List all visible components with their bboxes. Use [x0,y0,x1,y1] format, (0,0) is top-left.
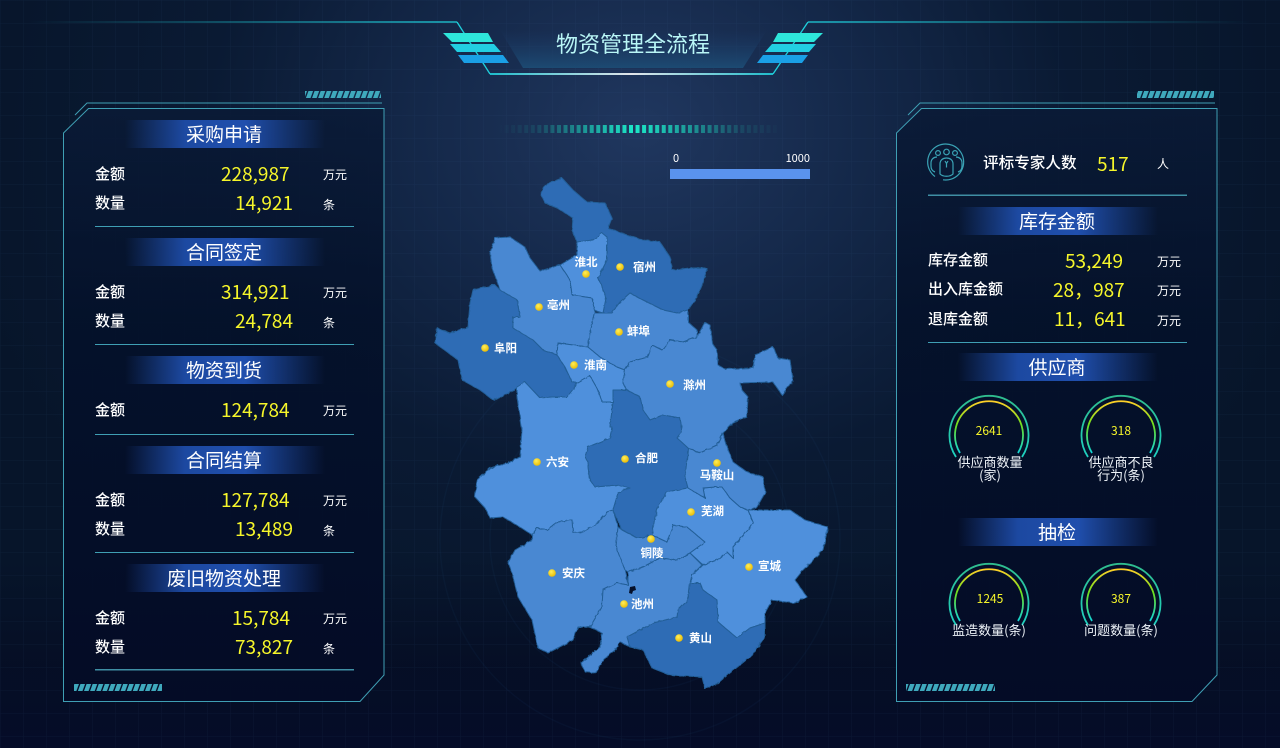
section: 废旧物资处理: 73,827 [235,633,293,660]
city labels: 宿州 [633,259,656,275]
section: 废旧物资处理: 万元 [323,610,347,627]
section: 合同签定 [95,238,354,345]
icon: right chevrons [757,33,823,63]
expert count: 517 [1097,150,1129,177]
gauge: 问题数量: 问题数量(条) [1084,620,1158,639]
section: 废旧物资处理: 条 [323,640,335,657]
region: 阜阳 [435,285,578,400]
region: 芜湖 [652,487,753,565]
section: 库存金额 [928,207,1187,343]
section: 物资到货: 金额 [95,399,125,420]
region: 淮北 [560,233,607,313]
gauge: 供应商数量: 2641 [976,422,1002,439]
section: 废旧物资处理 [95,564,354,670]
progress dots [498,125,782,133]
section: 库存金额: 万元 [1157,282,1181,299]
section: 库存金额: 库存金额 [1019,207,1095,234]
region: 蚌埠 [588,293,697,370]
gauge: 监造数量: 1245 [977,590,1004,607]
section: 废旧物资处理: 金额 [95,607,125,628]
city labels: 亳州 [547,297,570,313]
region: 安庆 [508,510,628,653]
gauge: 问题数量: 387 [1111,590,1131,607]
city labels: 宣城 [758,558,781,574]
gauge: 供应商不良行为: 行为(条) [1097,465,1145,484]
city labels: 安庆 [562,565,585,581]
gauge: 供应商数量 [950,396,1028,484]
region: 淮南 [557,343,627,402]
section: 采购申请: 采购申请 [186,120,262,147]
region: 宣城 [690,510,828,638]
section: 采购申请: 数量 [95,192,125,213]
section: 抽检 [950,518,1160,639]
region: 六安 [475,376,630,535]
gauge: 问题数量 [1082,564,1160,639]
section: 合同结算: 金额 [95,489,125,510]
city labels: 淮北 [574,254,598,270]
region: 池州 [581,553,702,673]
map of Anhui [435,178,828,689]
city labels: 黄山 [689,630,712,646]
section: 废旧物资处理: 数量 [95,636,125,657]
section: 合同签定: 万元 [323,284,347,301]
section: 抽检: 抽检 [1038,518,1076,545]
section: 合同结算: 数量 [95,518,125,539]
section: 合同结算 [95,446,354,553]
section: 合同结算: 条 [323,522,335,539]
section: 库存金额: 万元 [1157,312,1181,329]
city labels: 池州 [631,596,654,612]
city labels [481,254,781,646]
region: 滁州 [623,322,793,453]
region: 黄山 [627,583,765,689]
section: 合同结算: 127,784 [221,486,290,513]
expert count: 评标专家人数 [983,151,1077,173]
city labels: 滁州 [683,377,706,393]
city labels: 马鞍山 [700,467,734,483]
section: 合同签定: 数量 [95,310,125,331]
region: 宿州 [541,178,707,313]
gauge: 供应商数量: 供应商数量 [957,452,1023,471]
map legend: 0 [673,150,679,166]
section: 物资到货: 万元 [323,402,347,419]
gauge: 监造数量 [950,564,1028,639]
section: 合同结算: 合同结算 [186,446,262,473]
section: 供应商 [950,353,1160,484]
region: 马鞍山 [685,433,765,510]
city labels: 蚌埠 [627,323,650,339]
section: 库存金额: 退库金额 [928,308,988,329]
region: 合肥 [585,390,688,538]
section: 供应商: 供应商 [1028,353,1086,380]
region: 铜陵 [616,525,705,572]
section: 采购申请: 条 [323,196,335,213]
region: 亳州 [490,237,595,355]
section: 物资到货 [95,356,354,435]
city labels: 铜陵 [640,545,664,561]
section: 库存金额: 库存金额 [928,249,988,270]
city labels: 芜湖 [701,503,724,519]
section: 合同签定: 条 [323,314,335,331]
expert count: 人 [1157,155,1169,172]
section: 废旧物资处理: 废旧物资处理 [167,564,281,591]
section: 物资到货: 物资到货 [186,356,262,383]
section: 采购申请 [95,120,354,227]
section: 采购申请: 14,921 [235,189,293,216]
lake [629,586,636,594]
section: 库存金额: 53,249 [1065,247,1123,274]
city labels: 淮南 [584,357,607,373]
city labels: 阜阳 [494,340,517,356]
section: 物资到货: 124,784 [221,396,290,423]
city labels: 六安 [546,454,569,470]
panel: right [896,91,1217,702]
section: 合同结算: 万元 [323,492,347,509]
gauge: 供应商不良行为: 供应商不良 [1088,452,1154,471]
section: 库存金额: 出入库金额 [928,278,1003,299]
map legend [670,150,810,179]
section: 合同签定: 24,784 [235,307,293,334]
section: 合同签定: 金额 [95,281,125,302]
section: 合同签定: 合同签定 [186,238,262,265]
gauge: 供应商不良行为: 318 [1111,422,1131,439]
section: 采购申请: 228,987 [221,160,290,187]
title: 物资管理全流程 [556,27,710,59]
title banner [30,22,1250,74]
icon: left chevrons [443,33,509,63]
section: 采购申请: 万元 [323,166,347,183]
expert count [983,150,1169,177]
panel: left [64,91,384,702]
gauge: 监造数量: 监造数量(条) [952,620,1026,639]
section: 合同结算: 13,489 [235,515,293,542]
section: 库存金额: 万元 [1157,253,1181,270]
section: 废旧物资处理: 15,784 [232,604,290,631]
city labels: 合肥 [635,450,658,466]
section: 库存金额: 28，987 [1053,276,1125,303]
section: 库存金额: 11，641 [1054,305,1126,332]
section: 合同签定: 314,921 [221,278,290,305]
icon: experts [928,144,964,180]
map legend: 1000 [786,150,810,166]
section: 采购申请: 金额 [95,163,125,184]
gauge: 供应商数量: (家) [979,465,1001,484]
gauge: 供应商不良行为 [1082,396,1160,484]
